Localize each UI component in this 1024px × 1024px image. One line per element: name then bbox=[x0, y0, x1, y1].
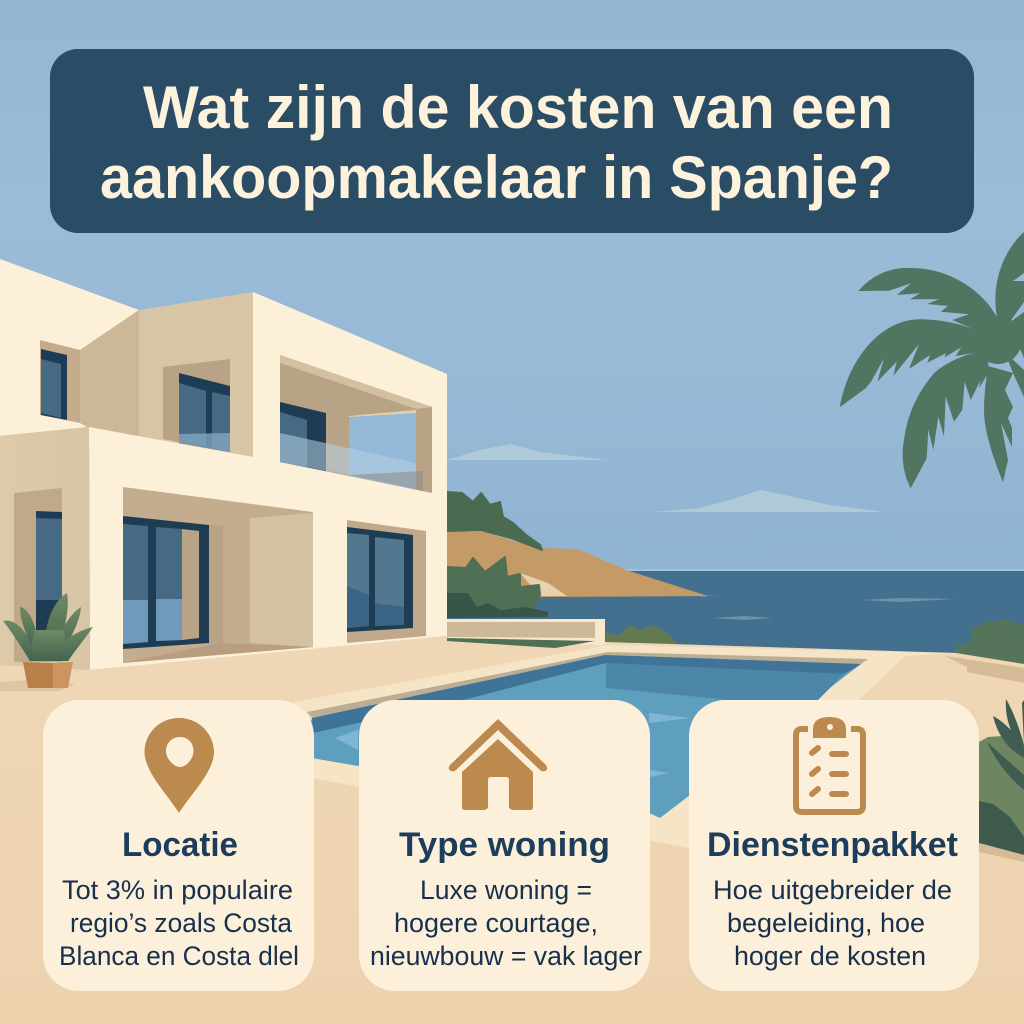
upper left window bbox=[40, 340, 80, 423]
title text: Wat zijn de kosten van een bbox=[143, 74, 893, 141]
body: type woning: hogere courtage, bbox=[394, 908, 598, 938]
palm tree bbox=[840, 232, 1024, 488]
balcony glass bbox=[280, 433, 416, 490]
body: locatie: regio’s zoals Costa bbox=[70, 908, 293, 938]
pot shadow bbox=[0, 680, 75, 691]
heading: locatie: Locatie bbox=[122, 826, 238, 864]
body: locatie: Tot 3% in populaire bbox=[62, 875, 293, 905]
lower left window bbox=[14, 488, 62, 662]
pool rim shade bbox=[312, 655, 861, 733]
villa bbox=[0, 259, 447, 670]
title panel bbox=[50, 49, 974, 233]
bottom right plant bbox=[979, 699, 1024, 862]
body: type woning: Luxe woning = bbox=[420, 875, 592, 905]
shade panel bbox=[250, 513, 313, 647]
low wall bbox=[447, 619, 605, 648]
lower left wing bbox=[0, 427, 90, 670]
balcony sky opening bbox=[349, 413, 416, 490]
palm trunk crown bbox=[974, 316, 1022, 364]
main cream wall bbox=[89, 292, 447, 670]
terracotta pot bbox=[23, 662, 53, 688]
ground floor opening bbox=[123, 487, 313, 663]
icon: house bbox=[449, 719, 547, 810]
background: sky bbox=[0, 0, 1024, 575]
headland with bushes bbox=[447, 492, 708, 618]
palm frond top bbox=[858, 268, 997, 332]
middle window bbox=[163, 359, 230, 452]
clouds bbox=[447, 444, 885, 512]
terrace shade right bbox=[945, 656, 1024, 683]
sea bbox=[440, 569, 1024, 665]
sliding door bbox=[123, 516, 209, 649]
palm frond lower bbox=[903, 351, 989, 488]
pool reflections bbox=[335, 713, 690, 777]
icon: clipboard bbox=[796, 717, 863, 812]
pool lip bbox=[307, 652, 868, 718]
heading: type woning: Type woning bbox=[399, 826, 610, 864]
shaded block bbox=[80, 292, 253, 458]
title text: aankoopmakelaar in Spanje? bbox=[100, 144, 893, 211]
far bush bbox=[606, 625, 677, 644]
pool back wall shade bbox=[606, 663, 844, 700]
body: dienstenpakket: Hoe uitgebreider de bbox=[713, 875, 952, 905]
terrace ground bbox=[0, 636, 1024, 1024]
right shrub bbox=[956, 620, 1024, 663]
palm frond down bbox=[984, 366, 1013, 482]
icon: location pin bbox=[144, 718, 214, 813]
heading: dienstenpakket: Dienstenpakket bbox=[707, 826, 958, 864]
panel: locatie bbox=[43, 700, 314, 991]
right window bbox=[347, 520, 426, 643]
potted plant bbox=[0, 593, 93, 691]
body: type woning: nieuwbouw = vak lager bbox=[370, 941, 642, 971]
balcony bbox=[280, 355, 432, 493]
pool bbox=[293, 645, 956, 848]
upper left wall bbox=[0, 259, 139, 436]
panel: type woning bbox=[359, 700, 650, 991]
body: dienstenpakket: hoger de kosten bbox=[734, 941, 926, 971]
body: locatie: Blanca en Costa dlel bbox=[59, 941, 299, 971]
body: dienstenpakket: begeleiding, hoe bbox=[727, 908, 925, 938]
palm frond left bbox=[840, 319, 987, 407]
palm frond top right bbox=[995, 232, 1024, 397]
pool water bbox=[300, 655, 861, 818]
balcony window bbox=[280, 402, 326, 471]
panel: dienstenpakket bbox=[689, 700, 979, 991]
pool coping bbox=[293, 645, 956, 848]
plant leaves bbox=[3, 593, 93, 661]
